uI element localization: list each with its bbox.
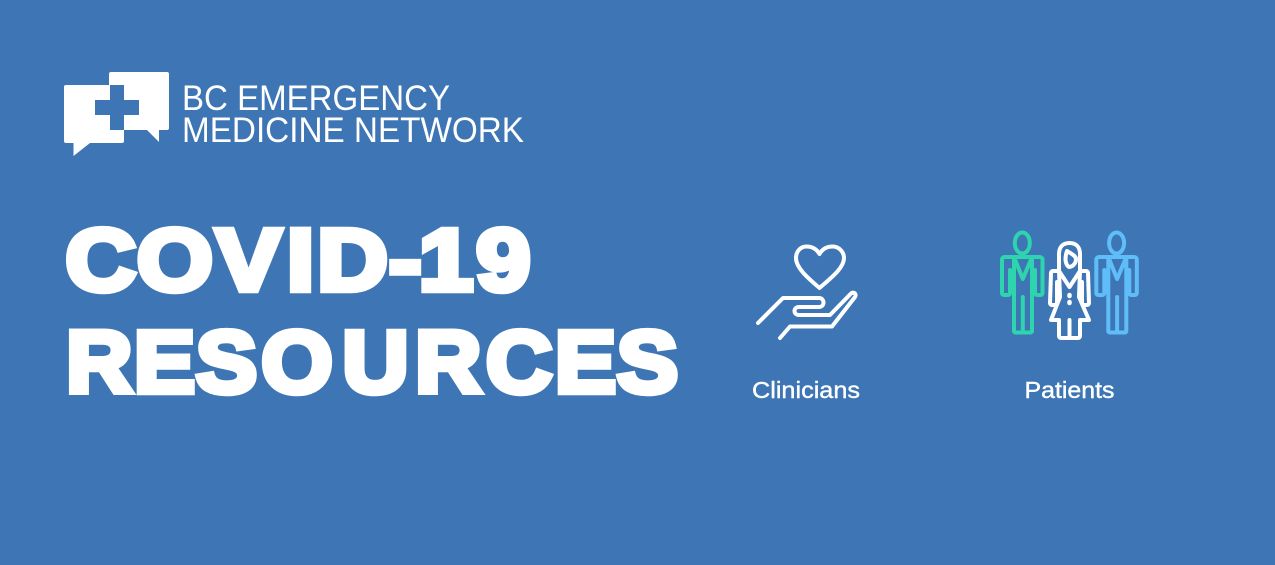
logo: BC Emergency Medicine Network xyxy=(64,72,524,156)
title xyxy=(66,211,678,411)
person: woman xyxy=(1050,243,1089,338)
person: right man xyxy=(1096,232,1137,332)
logo text: MEDICINE NETWORK xyxy=(182,110,524,150)
title: COVID-19 xyxy=(66,211,530,309)
label: Clinicians: Clinicians xyxy=(752,377,860,403)
person: left man xyxy=(1002,232,1042,332)
logo text xyxy=(182,78,524,150)
label: Patients: Patients xyxy=(1024,377,1114,403)
title: RESOURCES xyxy=(66,313,678,411)
logo text: BC EMERGENCY xyxy=(182,78,450,118)
icon: speech bubbles with cross xyxy=(64,72,169,156)
icon: hand holding heart xyxy=(758,246,856,338)
icon: three people xyxy=(1002,232,1137,338)
